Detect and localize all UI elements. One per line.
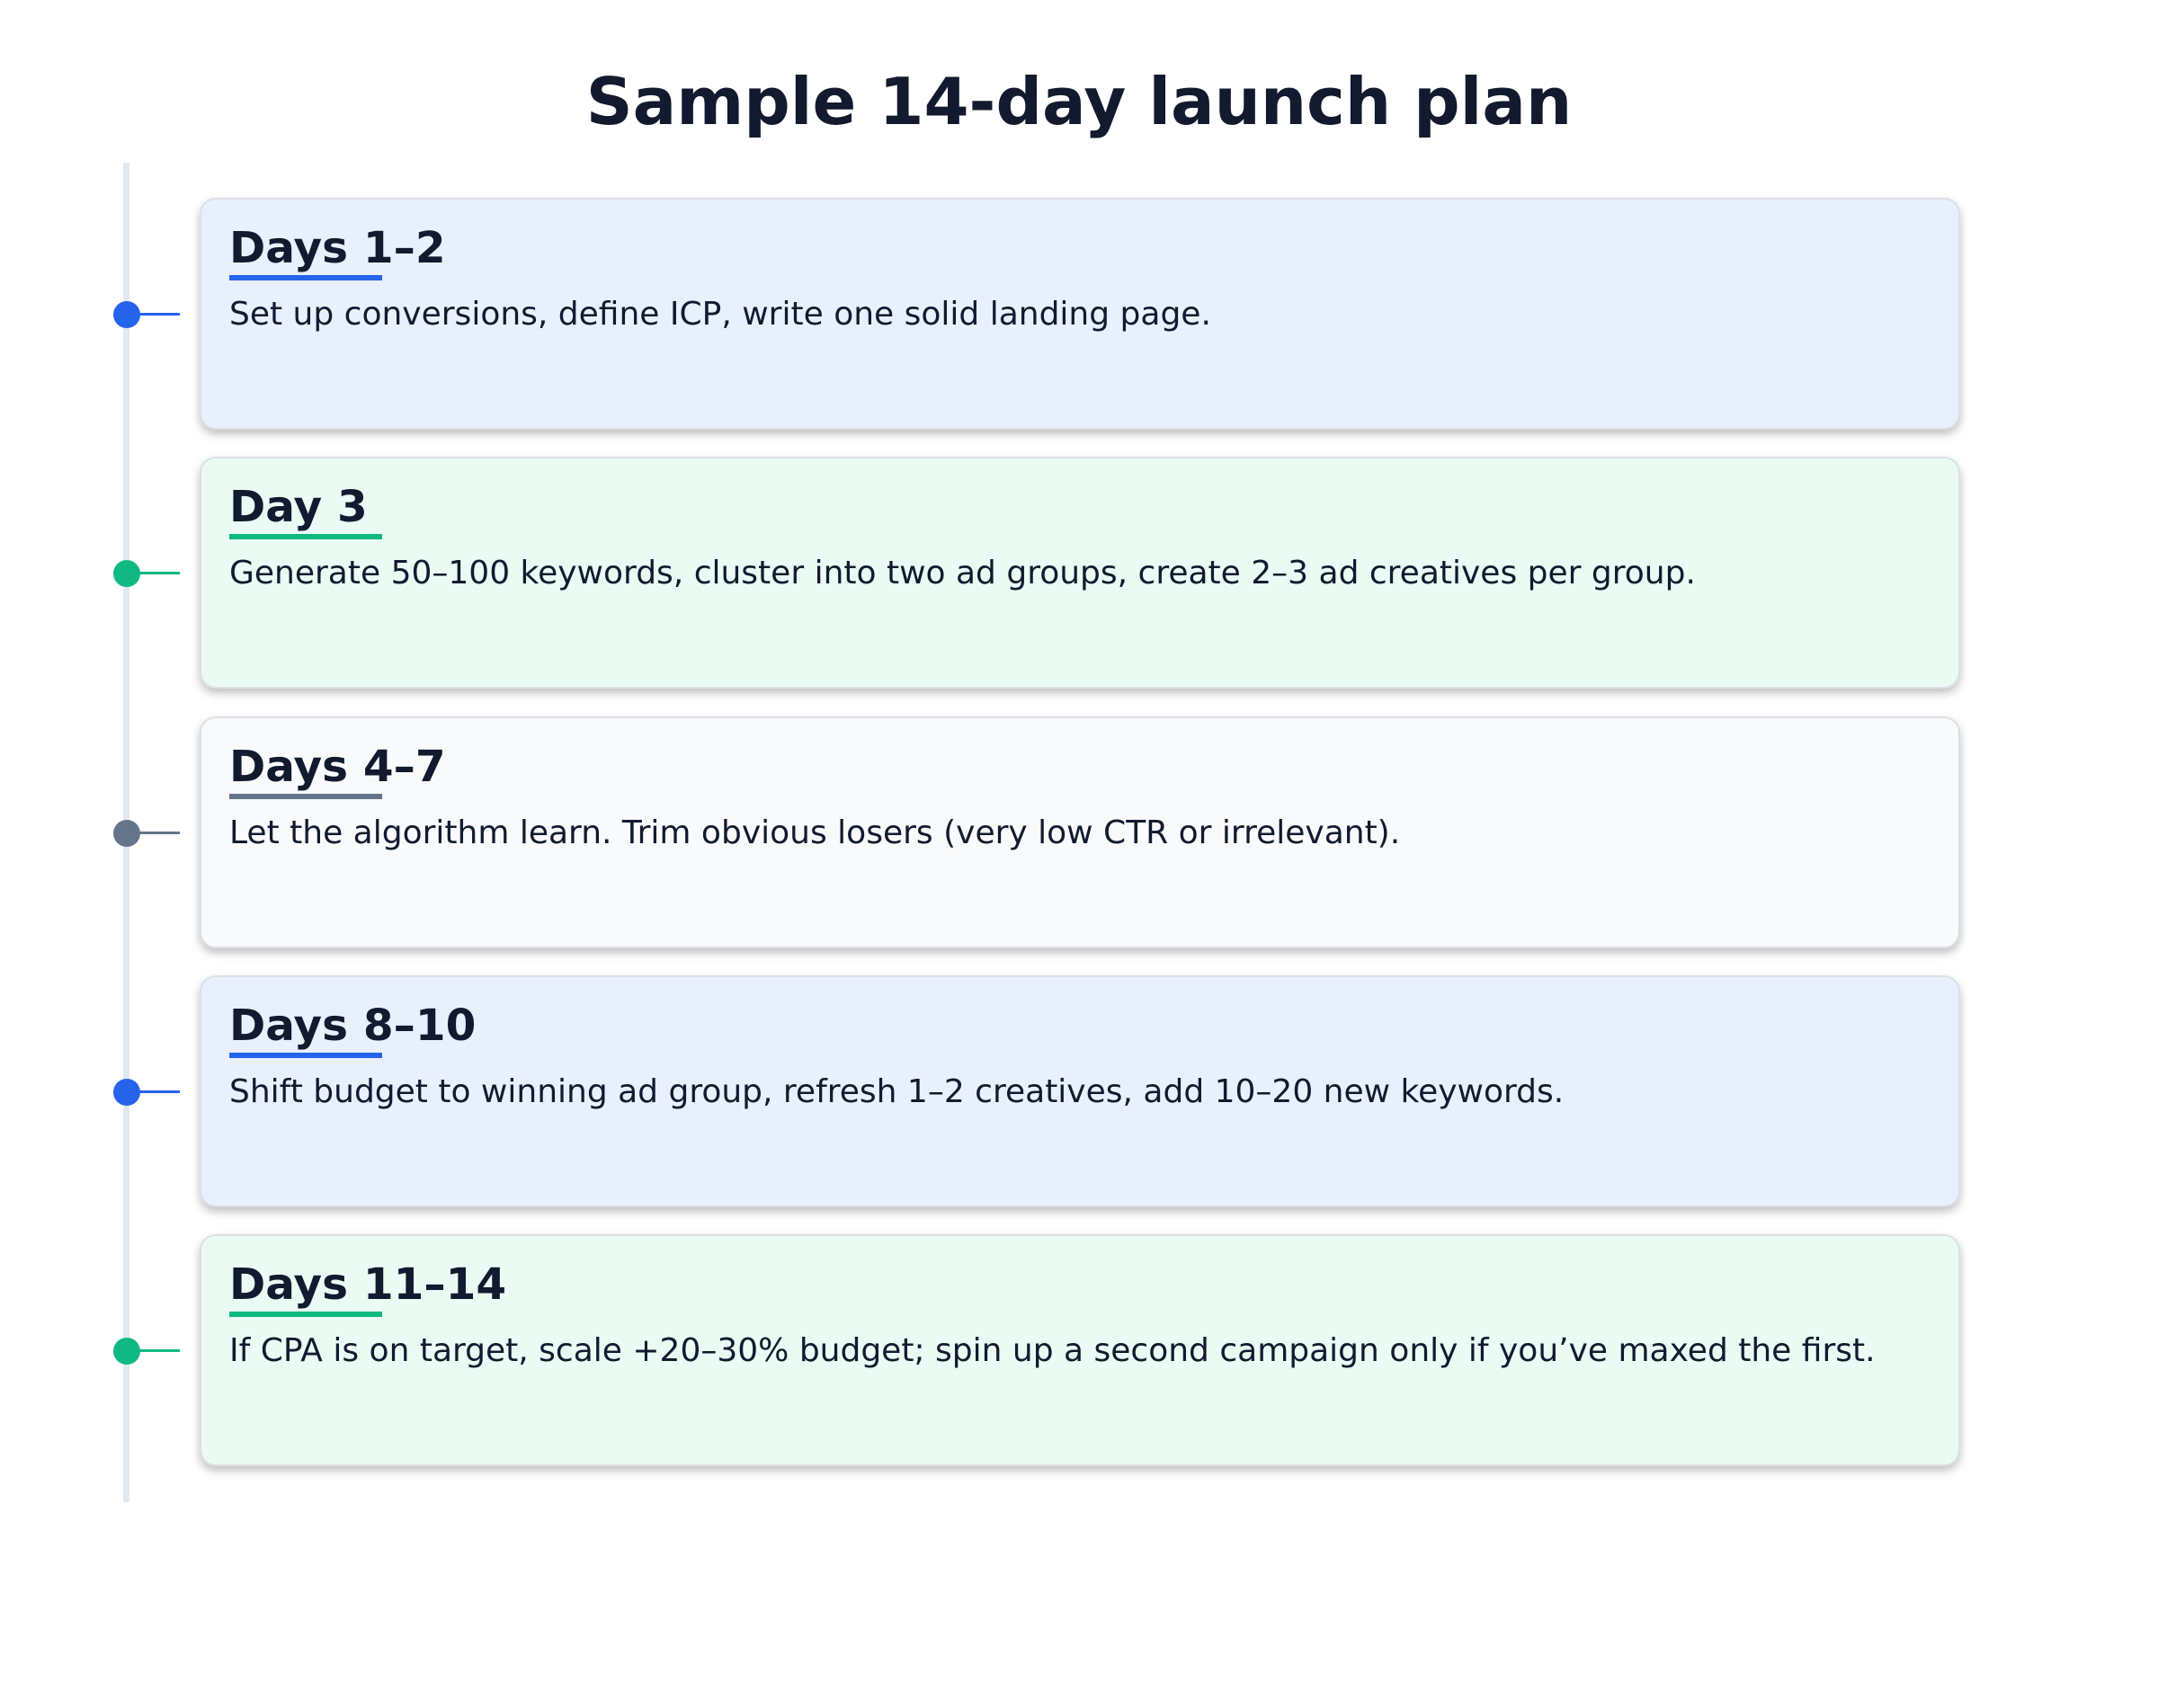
title: Sample 14-day launch plan [586,64,1572,139]
timeline line [123,163,129,1502]
underline [229,275,382,280]
card: days 11-14 [200,1234,1960,1466]
connector [135,1090,180,1093]
description: Shift budget to winning ad group, refresh 1–2 creatives, add 10–20 new keywords. [229,1073,1564,1110]
underline [229,794,382,799]
heading: Days 8–10 [229,1001,476,1051]
card: days 4-7 [200,716,1960,948]
heading: Days 1–2 [229,223,446,273]
description: Set up conversions, define ICP, write one solid landing page. [229,296,1211,333]
connector [135,832,180,834]
step: days 11-14 [113,1233,1966,1476]
timeline dot [113,301,140,328]
timeline dot [113,1079,140,1106]
card: days 1-2 [200,198,1960,430]
heading: Day 3 [229,482,368,532]
heading: Days 11–14 [229,1259,506,1310]
step: day 3 [113,457,1966,698]
heading: Days 4–7 [229,742,446,792]
connector [135,572,180,574]
card: day 3 [200,457,1960,689]
underline [229,1053,382,1058]
description: Generate 50–100 keywords, cluster into two ad groups, create 2–3 ad creatives per group. [229,555,1696,592]
card: days 8-10 [200,975,1960,1207]
description: Let the algorithm learn. Trim obvious losers (very low CTR or irrelevant). [229,814,1400,851]
step: days 4-7 [113,716,1966,958]
underline [229,1312,382,1317]
timeline dot [113,560,140,587]
step: days 1-2 [113,198,1966,439]
timeline dot [113,1338,140,1365]
step: days 8-10 [113,974,1966,1217]
description: If CPA is on target, scale +20–30% budget; spin up a second campaign only if you’ve maxed the first. [229,1332,1876,1369]
timeline dot [113,820,140,847]
connector [135,313,180,316]
connector [135,1349,180,1352]
underline [229,534,382,539]
